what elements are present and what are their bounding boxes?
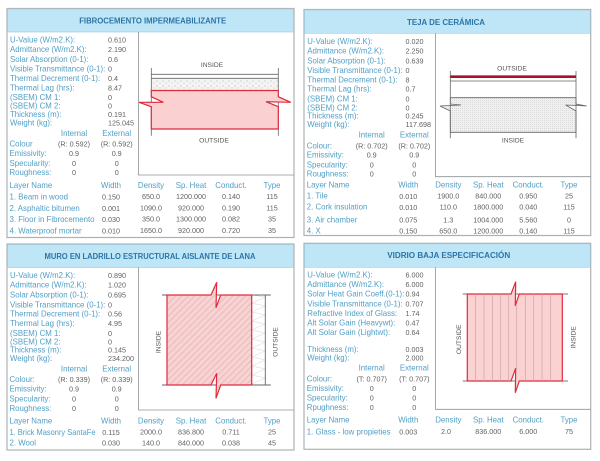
- thermal properties: 0: [406, 103, 410, 112]
- thermal properties: 0.4: [108, 74, 118, 83]
- layer table: 115: [563, 226, 575, 235]
- section diagram: tile roof: OUTSIDE: [497, 66, 527, 72]
- thermal properties: Alt Solar Gain (Heavywt):: [307, 318, 395, 327]
- surface properties: Colour:: [307, 141, 332, 150]
- thermal properties: 0.47: [406, 318, 420, 327]
- layer table: Width: [101, 416, 121, 425]
- thermal properties: U-Value (W/m2.K):: [10, 271, 75, 280]
- thermal properties: Weight (kg):: [10, 354, 52, 363]
- layer table: [10, 181, 281, 235]
- thermal properties: [10, 271, 134, 363]
- layer table: [307, 180, 578, 235]
- surface properties: Emissivity:: [10, 385, 47, 394]
- thermal properties: (SBEM) CM 1:: [307, 95, 358, 104]
- layer table: Layer Name: [10, 416, 53, 425]
- layer table: 35: [268, 226, 276, 235]
- surface properties: 0: [370, 170, 374, 179]
- layer table: Density: [138, 181, 164, 190]
- surface properties: 0: [72, 159, 76, 168]
- layer table: 1200.000: [473, 226, 503, 235]
- heading: TEJA DE CERÁMICA: [407, 17, 485, 27]
- surface properties: 0: [412, 170, 416, 179]
- surface properties: External: [102, 129, 131, 138]
- layer table: Layer Name: [307, 180, 350, 189]
- thermal properties: (SBEM) CM 2:: [307, 103, 358, 112]
- surface properties: [10, 365, 133, 413]
- thermal properties: 0: [406, 95, 410, 104]
- panel: teja de ceramica: [304, 10, 591, 236]
- surface properties: 0.9: [409, 151, 419, 160]
- thermal properties: [307, 37, 431, 129]
- thermal properties: 125.045: [108, 118, 134, 127]
- layer table: 1090.0: [140, 204, 162, 213]
- surface properties: 0: [412, 161, 416, 170]
- thermal properties: Thickness (m):: [10, 110, 61, 119]
- thermal properties: 2.000: [406, 353, 424, 362]
- surface properties: 0: [412, 403, 416, 412]
- thermal properties: 0.695: [108, 291, 126, 300]
- layer table: Density: [435, 180, 461, 189]
- surface properties: 0.9: [69, 149, 79, 158]
- thermal properties: 0.145: [108, 346, 126, 355]
- surface properties: 0: [115, 404, 119, 413]
- layer table: 1. Tile: [307, 192, 328, 201]
- thermal properties: (SBEM) CM 2:: [10, 338, 61, 347]
- layer table: 0.190: [222, 204, 240, 213]
- layer table: Sp. Heat: [473, 416, 504, 425]
- layer table: 0.010: [399, 203, 417, 212]
- layer table: Width: [101, 181, 121, 190]
- thermal properties: Visible Transmittance (0-1):: [10, 300, 105, 309]
- layer table: 0.003: [399, 427, 417, 436]
- thermal properties: (SBEM) CM 1:: [10, 329, 61, 338]
- layer table: Type: [263, 181, 281, 190]
- surface properties: 0.9: [69, 385, 79, 394]
- panel: muro en ladrillo: [7, 244, 294, 450]
- layer table: 0.040: [519, 202, 537, 211]
- layer table: 0.115: [102, 428, 120, 437]
- layer table: 350.0: [142, 215, 160, 224]
- layer table: 0.010: [399, 192, 417, 201]
- thermal properties: 0.56: [108, 310, 122, 319]
- thermal properties: Solar Absorption (0-1):: [10, 291, 88, 300]
- layer table: 0.950: [519, 191, 537, 200]
- layer table: 35: [268, 215, 276, 224]
- thermal properties: Thermal Decrement (0-1):: [10, 74, 100, 83]
- thermal properties: 1.74: [406, 309, 420, 318]
- layer table: 0.082: [222, 215, 240, 224]
- thermal properties: 6.000: [406, 280, 424, 289]
- surface properties: 0: [370, 394, 374, 403]
- layer table: Width: [398, 180, 418, 189]
- thermal properties: Visible Transmittance (0-1):: [307, 299, 403, 308]
- layer table: 4. Waterproof mortar: [10, 226, 82, 235]
- surface properties: External: [102, 365, 131, 374]
- thermal properties: Solar Heat Gain Coeff.(0-1):: [307, 290, 404, 299]
- thermal properties: 0.7: [406, 85, 416, 94]
- layer table: 1900.0: [437, 192, 459, 201]
- surface properties: Rpughness:: [307, 403, 349, 412]
- surface properties: Specularity:: [307, 394, 348, 403]
- thermal properties: 0: [108, 300, 112, 309]
- layer table: 0.010: [102, 226, 120, 235]
- surface properties: Roughness:: [10, 404, 51, 413]
- surface properties: Emissivity:: [307, 151, 344, 160]
- surface properties: [10, 129, 133, 177]
- layer table: Type: [560, 180, 578, 189]
- layer table: 3. Air chamber: [307, 216, 358, 225]
- layer table: Conduct.: [513, 180, 544, 189]
- thermal properties: Visible Transmittance (0-1):: [307, 66, 403, 75]
- heading: MURO EN LADRILLO ESTRUCTURAL AISLANTE DE LANA: [44, 251, 256, 261]
- surface properties: Colour:: [307, 374, 332, 383]
- thermal properties: U-Value (W/m2.K):: [10, 36, 75, 45]
- thermal properties: Admittance (W/m2.K):: [307, 47, 384, 56]
- thermal properties: Thermal Lag (hrs):: [10, 83, 75, 92]
- thermal properties: Thickness (m):: [307, 112, 359, 121]
- layer table: 0.140: [222, 192, 240, 201]
- thermal properties: 0: [108, 65, 112, 74]
- layer table: 920.000: [178, 226, 204, 235]
- thermal properties: [10, 36, 134, 127]
- surface properties: [307, 364, 429, 412]
- layer table: 920.000: [178, 204, 204, 213]
- surface properties: 0: [72, 404, 76, 413]
- thermal properties: 1.020: [108, 281, 126, 290]
- thermal properties: 0: [406, 66, 410, 75]
- surface properties: External: [400, 131, 429, 140]
- thermal properties: Thermal Decrement (0-1):: [307, 75, 398, 84]
- layer table: 2. Asphaltic bitumen: [10, 204, 80, 213]
- layer table: 840.000: [178, 438, 204, 447]
- layer table: 75: [565, 427, 573, 436]
- surface properties: Colour:: [10, 375, 35, 384]
- layer table: Type: [263, 416, 281, 425]
- layer table: 840.000: [475, 191, 501, 200]
- layer table: [10, 416, 281, 448]
- surface properties: Roughness:: [307, 170, 349, 179]
- thermal properties: Thermal Lag (hrs):: [10, 319, 75, 328]
- layer table: 115: [266, 204, 278, 213]
- thermal properties: 8: [406, 75, 410, 84]
- surface properties: 0: [72, 168, 76, 177]
- thermal properties: 0: [108, 93, 112, 102]
- thermal properties: Solar Absorption (0-1):: [10, 55, 88, 64]
- surface properties: 0: [72, 395, 76, 404]
- section diagram: roof: [138, 32, 294, 175]
- thermal properties: 8.47: [108, 83, 122, 92]
- layer table: 0: [567, 216, 571, 225]
- surface properties: Emissivity:: [307, 384, 344, 393]
- surface properties: (R: 0.339): [58, 375, 90, 384]
- thermal properties: 0: [108, 329, 112, 338]
- panel: fibrocemento impermeabilizante: [7, 8, 294, 238]
- heading: FIBROCEMENTO IMPERMEABILIZANTE: [79, 16, 226, 26]
- section diagram: glass: OUTSIDE: [456, 324, 463, 354]
- surface properties: Internal: [61, 365, 87, 374]
- thermal properties: Weight (kg):: [10, 118, 52, 127]
- layer table: 2000.0: [140, 428, 162, 437]
- surface properties: Specularity:: [10, 159, 50, 168]
- surface properties: 0: [412, 384, 416, 393]
- thermal properties: [307, 270, 424, 362]
- surface properties: Emissivity:: [10, 149, 47, 158]
- surface properties: External: [400, 364, 429, 373]
- surface properties: 0: [370, 384, 374, 393]
- thermal properties: 234.200: [108, 354, 134, 363]
- panel: vidrio baja especificacion: [304, 243, 591, 449]
- thermal properties: 6.000: [406, 270, 424, 279]
- surface properties: Internal: [359, 131, 385, 140]
- surface properties: (R: 0.592): [101, 139, 133, 148]
- thermal properties: 0.890: [108, 271, 126, 280]
- thermal properties: Refractive Index of Glass:: [307, 309, 397, 318]
- layer table: 1004.000: [473, 215, 503, 224]
- section diagram: brick wall: INSIDE: [156, 330, 162, 353]
- thermal properties: (SBEM) CM 1:: [10, 93, 61, 102]
- layer table: 0.030: [102, 439, 120, 448]
- layer table: Layer Name: [307, 416, 350, 425]
- thermal properties: 0.245: [406, 112, 424, 121]
- layer table: 0.150: [399, 226, 417, 235]
- layer table: 1800.000: [473, 202, 503, 211]
- surface properties: 0.9: [367, 151, 377, 160]
- layer table: 1.3: [443, 215, 453, 224]
- layer table: 1650.0: [140, 226, 162, 235]
- layer table: 1. Glass - low propieties: [307, 427, 391, 436]
- thermal properties: Admittance (W/m2.K):: [307, 280, 384, 289]
- surface properties: (T: 0.707): [399, 374, 429, 383]
- layer table: 0.038: [222, 438, 240, 447]
- surface properties: Colour: [10, 139, 33, 148]
- layer table: 25: [565, 192, 573, 201]
- surface properties: 0.9: [112, 149, 122, 158]
- section diagram: glass: [436, 267, 591, 409]
- thermal properties: 0.191: [108, 110, 126, 119]
- layer table: 2. Cork insulation: [307, 203, 367, 212]
- layer table: Density: [435, 416, 461, 425]
- layer table: Conduct.: [215, 416, 247, 425]
- surface properties: Internal: [61, 129, 87, 138]
- thermal properties: 0.020: [406, 37, 424, 46]
- surface properties: (R: 0.702): [356, 141, 388, 150]
- thermal properties: 0.639: [406, 56, 424, 65]
- layer table: Layer Name: [10, 181, 53, 190]
- thermal properties: Solar Absorption (0-1):: [307, 56, 386, 65]
- layer table: 1. Beam in wood: [10, 192, 68, 201]
- thermal properties: 0.707: [406, 299, 424, 308]
- surface properties: Specularity:: [307, 161, 348, 170]
- heading: VIDRIO BAJA ESPECIFICACIÓN: [387, 249, 510, 260]
- layer table: Width: [398, 416, 418, 425]
- layer table: Sp. Heat: [473, 180, 504, 189]
- layer table: 140.0: [142, 438, 160, 447]
- layer table: 1. Brick Masonry SantaFe: [10, 428, 96, 437]
- layer table: 2.0: [441, 427, 451, 436]
- surface properties: Roughness:: [10, 168, 51, 177]
- layer table: 45: [268, 438, 276, 447]
- surface properties: 0.9: [112, 385, 122, 394]
- section diagram: glass: INSIDE: [570, 326, 578, 348]
- section diagram: brick wall: OUTSIDE: [272, 327, 280, 357]
- thermal properties: 4.95: [108, 319, 122, 328]
- layer table: 650.0: [439, 226, 457, 235]
- layer table: 25: [268, 428, 276, 437]
- thermal properties: Admittance (W/m2.K):: [10, 45, 87, 54]
- thermal properties: Thermal Lag (hrs):: [307, 85, 372, 94]
- surface properties: 0: [370, 403, 374, 412]
- surface properties: (R: 0.592): [58, 139, 90, 148]
- layer table: Sp. Heat: [176, 416, 207, 425]
- layer table: 2. Wool: [10, 439, 36, 448]
- surface properties: Internal: [359, 364, 385, 373]
- layer table: 3. Floor in Fibrocemento: [10, 215, 95, 224]
- layer table: 0.711: [222, 428, 240, 437]
- surface properties: (T: 0.707): [357, 374, 387, 383]
- thermal properties: 0: [108, 338, 112, 347]
- thermal properties: Thickness (m):: [10, 346, 61, 355]
- layer table: 0.075: [399, 216, 417, 225]
- layer table: 650.0: [142, 192, 160, 201]
- section diagram: roof: OUTSIDE: [199, 138, 229, 144]
- layer table: 836.800: [178, 428, 204, 437]
- thermal properties: 0.003: [406, 345, 424, 354]
- thermal properties: 0.610: [108, 36, 126, 45]
- layer table: 115: [563, 203, 575, 212]
- surface properties: 0: [412, 394, 416, 403]
- section diagram: roof: INSIDE: [201, 62, 224, 69]
- thermal properties: Visible Transmittance (0-1):: [10, 65, 105, 74]
- layer table: Type: [560, 416, 578, 425]
- layer table: 0.150: [102, 192, 120, 201]
- layer table: Density: [138, 416, 164, 425]
- thermal properties: Thickness (m):: [307, 345, 359, 354]
- thermal properties: Thermal Decrement (0-1):: [10, 310, 100, 319]
- layer table: 110.0: [440, 202, 457, 211]
- surface properties: [307, 131, 430, 179]
- thermal properties: Alt Solar Gain (Lightwt):: [307, 328, 390, 337]
- surface properties: 0: [370, 161, 374, 170]
- layer table: 836.000: [475, 427, 501, 436]
- layer table: 0.140: [519, 226, 537, 235]
- layer table: 0.001: [102, 204, 120, 213]
- surface properties: 0: [115, 395, 119, 404]
- section diagram: tile roof: INSIDE: [502, 138, 525, 144]
- layer table: 1200.000: [176, 192, 206, 201]
- surface properties: Specularity:: [10, 395, 50, 404]
- layer table: 4. X: [307, 226, 322, 235]
- surface properties: 0: [115, 168, 119, 177]
- surface properties: (R: 0.339): [101, 375, 133, 384]
- thermal properties: 2.190: [108, 45, 126, 54]
- layer table: Conduct.: [215, 181, 247, 190]
- layer table: [307, 416, 578, 436]
- thermal properties: (SBEM) CM 2:: [10, 102, 61, 111]
- layer table: 0.030: [102, 215, 120, 224]
- thermal properties: U-Value (W/m2.K):: [307, 270, 373, 279]
- thermal properties: Weight (kg):: [307, 353, 349, 362]
- layer table: 1300.000: [176, 215, 206, 224]
- layer table: Conduct.: [513, 416, 544, 425]
- layer table: 0.720: [222, 226, 240, 235]
- thermal properties: U-Value (W/m2.K):: [307, 37, 373, 46]
- thermal properties: Weight (kg):: [307, 120, 349, 129]
- surface properties: (R: 0.702): [398, 141, 430, 150]
- layer table: 6.000: [519, 427, 537, 436]
- layer table: 5.560: [519, 215, 537, 224]
- thermal properties: 2.250: [406, 47, 424, 56]
- thermal properties: 0.64: [406, 328, 420, 337]
- section diagram: brick wall: [138, 268, 294, 410]
- thermal properties: 117.698: [406, 120, 431, 129]
- surface properties: 0: [115, 159, 119, 168]
- section diagram: tile roof: [436, 33, 591, 177]
- thermal properties: 0.94: [406, 290, 420, 299]
- thermal properties: 0: [108, 102, 112, 111]
- layer table: Sp. Heat: [176, 181, 207, 190]
- layer table: 115: [266, 192, 278, 201]
- thermal properties: 0.6: [108, 55, 118, 64]
- thermal properties: Admittance (W/m2.K):: [10, 281, 87, 290]
